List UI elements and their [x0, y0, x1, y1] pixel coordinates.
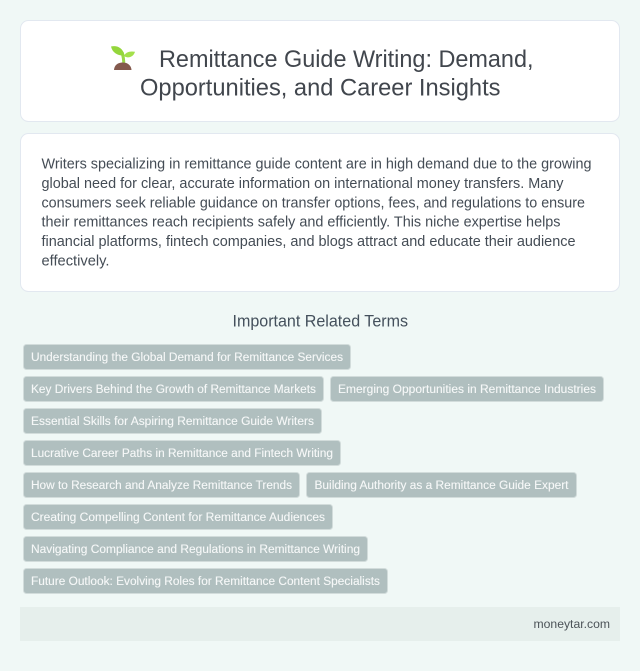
tag 6 [24, 472, 300, 498]
tag 9 [24, 536, 368, 562]
panel: description card [20, 134, 620, 292]
tag 10: Future Outlook: Evolving Roles for Remittance Content Specialists [31, 574, 380, 588]
text block: description: Writers specializing in remittance guide content are in high demand due to the growing [42, 156, 592, 172]
tag 6: How to Research and Analyze Remittance Trends [31, 478, 292, 492]
panel: related term tags [24, 344, 604, 594]
footer source text: moneytar.com [534, 617, 610, 631]
tag 1: Understanding the Global Demand for Remittance Services [31, 350, 343, 364]
tag 8 [24, 504, 332, 530]
tag 2: Key Drivers Behind the Growth of Remittance Markets [31, 382, 316, 396]
text block: description: their remittances reach recipients safely and efficiently. This niche expertise helps [42, 214, 560, 230]
tag 1 [24, 344, 350, 370]
tag 4: Essential Skills for Aspiring Remittance Guide Writers [31, 414, 314, 428]
footer bar [20, 607, 620, 641]
text block: description: effectively. [42, 254, 110, 270]
title [140, 46, 534, 102]
text block: description: consumers seek reliable guidance on transfer options, fees, and regulations to ensure [42, 196, 585, 212]
text block: description: global need for clear, accurate information on international money transfers. Many [42, 176, 564, 192]
title: Remittance Guide Writing: Demand, [159, 46, 534, 73]
panel: title card [20, 20, 620, 122]
tag 8: Creating Compelling Content for Remittance Audiences [31, 510, 325, 524]
title: Opportunities, and Career Insights [140, 74, 500, 102]
tag 4 [24, 408, 322, 434]
tag 2 [24, 376, 324, 402]
tag 3 [330, 376, 604, 402]
text block: description: financial platforms, fintech companies, and blogs attract and educate their audience [42, 234, 576, 250]
tag 10 [24, 568, 388, 594]
tag 7 [306, 472, 576, 498]
tag 9: Navigating Compliance and Regulations in Remittance Writing [31, 542, 360, 556]
text block: description [42, 156, 592, 270]
tag 5 [24, 440, 340, 466]
tag 3: Emerging Opportunities in Remittance Industries [338, 382, 596, 396]
tag 5: Lucrative Career Paths in Remittance and Fintech Writing [31, 446, 333, 460]
icon: sprout [111, 46, 135, 70]
tag 7: Building Authority as a Remittance Guide Expert [314, 478, 569, 492]
heading: related terms: Important Related Terms [232, 312, 408, 330]
